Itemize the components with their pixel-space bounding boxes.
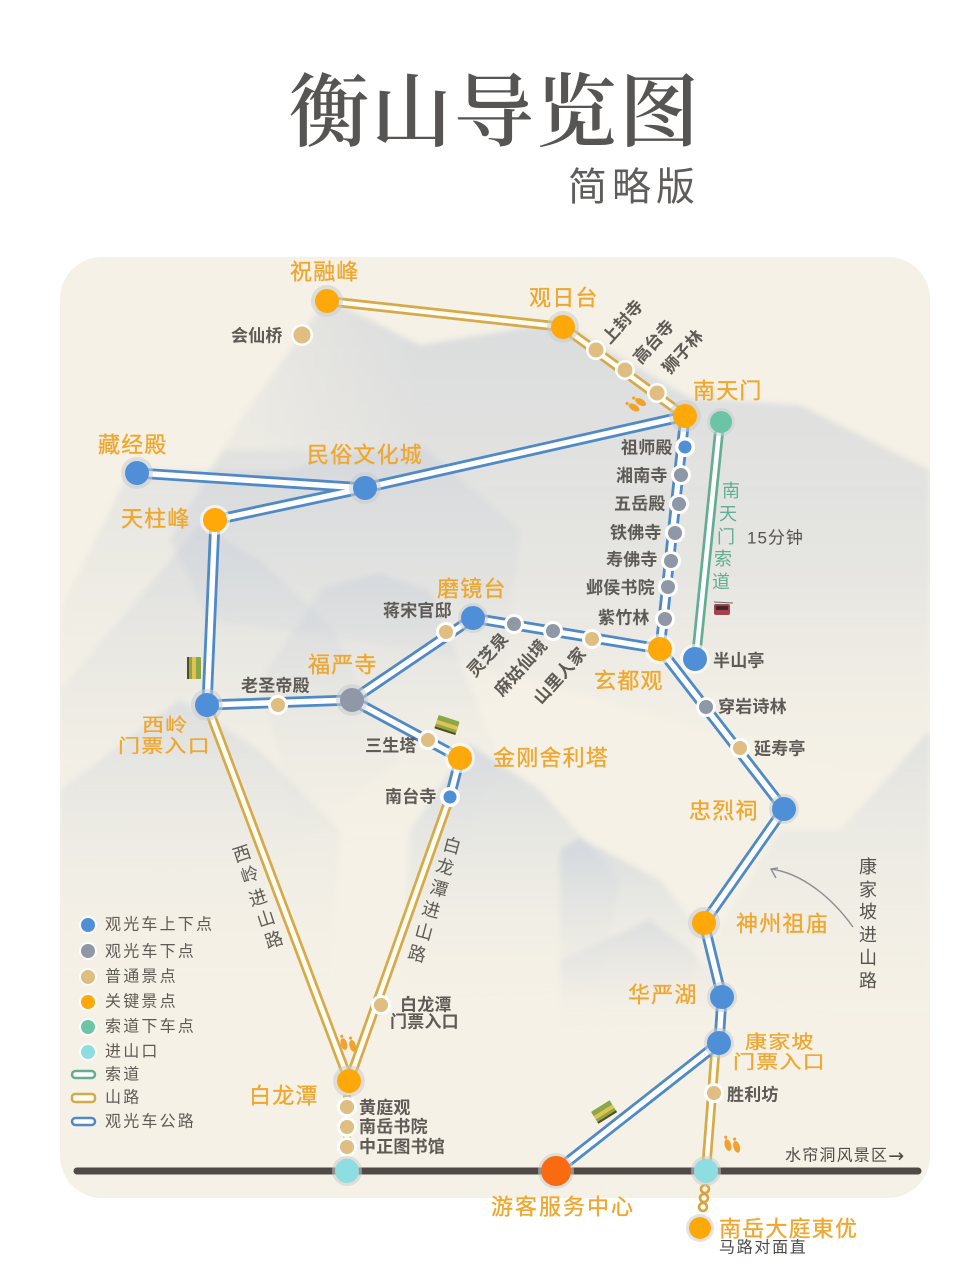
- label: 观日台: 观日台: [529, 286, 599, 310]
- node: 康家坡门票入口: [704, 1028, 734, 1058]
- label: 康家坡进山路 (vertical): 进: [859, 925, 877, 945]
- label: 玄都观: 玄都观: [594, 668, 664, 694]
- label: 西岭进山路: 路: [262, 928, 286, 952]
- label: 南天门索道 (vertical): 道: [712, 572, 730, 592]
- label: 华严湖: 华严湖: [628, 982, 698, 1008]
- legend item: 普通景点: [79, 968, 178, 986]
- label: 南天门索道 (vertical): 门: [717, 527, 735, 547]
- route: chain to south gate: [699, 1185, 709, 1211]
- label: 水帘洞风景区: 水帘洞风景区→: [785, 1145, 905, 1167]
- label: 南岳书院: 南岳书院: [359, 1116, 428, 1136]
- label: 磨镜台: 磨镜台: [437, 576, 507, 602]
- node: 观日台: [547, 311, 579, 343]
- node: 玄都观: [645, 634, 675, 664]
- label: 白龙潭进山路: 白: [441, 834, 463, 858]
- label: 灵芝泉: 灵芝泉: [463, 629, 512, 681]
- node: 寿佛寺: [661, 551, 681, 571]
- label: 紫竹林: 紫竹林: [598, 608, 650, 628]
- label: 康家坡门票入口: 门票入口: [733, 1052, 826, 1073]
- node: 山里人家: [582, 629, 602, 649]
- label: 神州祖庙: 神州祖庙: [736, 912, 829, 936]
- legend item: 进山口: 进山口: [105, 1042, 160, 1060]
- node: 华严湖: [707, 982, 737, 1012]
- label: 西岭进山路: [230, 842, 286, 952]
- node: 神州祖庙: [688, 907, 720, 939]
- label: 金刚舍利塔: 金刚舍利塔: [493, 746, 609, 770]
- label: 中正图书馆: 中正图书馆: [359, 1136, 445, 1156]
- icon: bus near 金刚舍利塔: [434, 715, 460, 735]
- label: 穿岩诗林: 穿岩诗林: [718, 696, 787, 716]
- node: 半山亭: [680, 644, 710, 674]
- label: 康家坡进山路 (vertical): [859, 857, 877, 991]
- label: 西岭门票入口: 门票入口: [118, 736, 211, 757]
- panel: map background: [60, 257, 930, 1198]
- node: 祖师殿: [675, 437, 695, 457]
- node: 灵芝泉: [504, 614, 524, 634]
- label: 白龙潭进山路: 龙: [434, 855, 456, 879]
- label: 半山亭: 半山亭: [713, 650, 765, 670]
- label: 白龙潭: 白龙潭: [249, 1084, 319, 1108]
- label: 狮子林: 狮子林: [659, 326, 707, 378]
- label: 白龙潭进山路: 山: [413, 920, 435, 944]
- legend item: 山路: 山路: [105, 1088, 141, 1106]
- node: 五岳殿: [669, 494, 689, 514]
- legend item: 观光车公路: [72, 1112, 196, 1130]
- label: 南天门索道 (vertical): 天: [719, 504, 737, 524]
- label: 白龙潭进山路: [406, 834, 463, 966]
- label: 西岭进山路: 进: [246, 886, 270, 910]
- title: 衡山导览图: [289, 70, 702, 158]
- label: 白龙潭进山路: 进: [420, 898, 442, 922]
- node: 蒋宋官邸: [436, 622, 456, 642]
- label: 三生塔: 三生塔: [365, 736, 417, 756]
- node: 黄庭观: [337, 1097, 357, 1117]
- label: 西岭进山路: 山: [254, 907, 278, 931]
- node: 延寿亭: [730, 738, 750, 758]
- node: 白龙潭门票入口: [371, 995, 391, 1015]
- icon: footprints near 康家坡: [722, 1133, 741, 1156]
- label: 福严寺: 福严寺: [308, 652, 378, 678]
- label: 白龙潭门票入口: 门票入口: [390, 1012, 459, 1032]
- node: 磨镜台: [458, 603, 488, 633]
- label: 祝融峰: 祝融峰: [290, 260, 360, 284]
- label: 山里人家: 山里人家: [529, 643, 590, 708]
- label: 南天门索道 (vertical): [712, 481, 740, 592]
- label: 康家坡进山路 (vertical): 山: [859, 948, 877, 968]
- legend item: 关键景点: [79, 992, 178, 1011]
- label: 寿佛寺: 寿佛寺: [606, 550, 658, 570]
- legend: [72, 916, 214, 1130]
- node: 游客服务中心: [538, 1153, 574, 1189]
- label: 南天门: 南天门: [693, 378, 763, 404]
- label: 南岳大庙东街: 南岳大庭東优: [719, 1216, 858, 1242]
- label: 南天门索道 (vertical): 索: [714, 549, 732, 569]
- label: 康家坡进山路 (vertical): 坡: [859, 902, 877, 922]
- label: 游客服务中心: 游客服务中心: [491, 1194, 635, 1220]
- node: 南台寺: [440, 787, 460, 807]
- label: 上封寺: 上封寺: [599, 296, 647, 348]
- route: sightseeing bus roads: [137, 416, 784, 1171]
- node: 湘南寺: [671, 465, 691, 485]
- label: 黄庭观: 黄庭观: [359, 1098, 411, 1118]
- label: 白龙潭进山路: 潭: [428, 877, 450, 901]
- label: 延寿亭: 延寿亭: [754, 738, 806, 758]
- node: 民俗文化城: [349, 472, 381, 504]
- route: mountain roads: [207, 301, 716, 1171]
- node: 白龙潭: [333, 1065, 365, 1097]
- node: 南天门: [669, 400, 701, 432]
- label: 民俗文化城: 民俗文化城: [307, 442, 423, 468]
- node: 南天门索道下车点: [707, 408, 735, 436]
- node: 麻姑仙境: [543, 621, 563, 641]
- label: 白龙潭进山路: 路: [406, 942, 428, 966]
- node: 三生塔: [418, 730, 438, 750]
- label: 西岭门票入口: 西岭: [142, 715, 188, 736]
- label: 高台寺: 高台寺: [629, 316, 678, 368]
- legend item: 关键景点: 关键景点: [105, 992, 178, 1010]
- label: 康家坡进山路 (vertical): 康: [859, 857, 877, 877]
- node: 忠烈祠: [769, 794, 799, 824]
- node: 紫竹林: [655, 609, 675, 629]
- node: 西岭门票入口: [191, 689, 223, 721]
- label: 马路对面直: 马路对面直: [719, 1238, 808, 1256]
- label: 康家坡门票入口: 康家坡: [745, 1032, 815, 1053]
- label: 铁佛寺: 铁佛寺: [610, 524, 662, 542]
- legend item: 观光车上下点: 观光车上下点: [105, 916, 214, 934]
- legend item: 山路: [72, 1088, 141, 1106]
- label: 15分钟: 15分钟: [747, 528, 804, 548]
- node: 福严寺: [336, 684, 368, 716]
- node: 祝融峰: [311, 285, 343, 317]
- route: cableway: [697, 432, 719, 648]
- node: 胜利坊: [704, 1083, 724, 1103]
- icon: cable car: [714, 602, 733, 615]
- label: 南台寺: 南台寺: [385, 786, 437, 806]
- node: 藏经殿: [121, 457, 153, 489]
- label: 白龙潭门票入口: 白龙潭: [400, 996, 452, 1014]
- icon: footprints near 白龙潭: [338, 1032, 357, 1055]
- node: 南岳书院: [337, 1117, 357, 1137]
- icon: bus near 游客服务中心: [591, 1100, 617, 1124]
- node: 天柱峰: [200, 505, 230, 535]
- label: 邺侯书院: 邺侯书院: [586, 578, 655, 598]
- legend item: 普通景点: 普通景点: [105, 968, 178, 986]
- node: 铁佛寺: [665, 523, 685, 543]
- legend item: 观光车公路: 观光车公路: [105, 1112, 196, 1130]
- label: 老圣帝殿: 老圣帝殿: [241, 676, 310, 696]
- icon: footprints near 南天门: [624, 393, 647, 415]
- node: 会仙桥: [291, 324, 313, 346]
- mountains backdrop: [60, 298, 930, 1040]
- node: 狮子林: [647, 383, 667, 403]
- label: 康家坡进山路 (vertical): 路: [859, 971, 877, 991]
- label: 湘南寺: 湘南寺: [616, 466, 668, 486]
- node: 金刚舍利塔: [445, 743, 475, 773]
- legend item: 索道: [72, 1066, 141, 1084]
- label: 西岭进山路: 岭: [238, 863, 262, 887]
- node: 高台寺: [615, 360, 635, 380]
- label: 五岳殿: 五岳殿: [614, 494, 666, 514]
- node: 南岳大庙: [686, 1214, 714, 1242]
- label: 天柱峰: 天柱峰: [121, 506, 191, 532]
- label: 忠烈祠: 忠烈祠: [689, 798, 759, 824]
- label: 白龙潭门票入口: [390, 996, 459, 1032]
- label: 康家坡进山路 (vertical): 家: [859, 880, 877, 900]
- node: 穿岩诗林: [696, 697, 716, 717]
- node: 上封寺: [586, 340, 606, 360]
- label: 康家坡门票入口: [733, 1032, 826, 1073]
- label: 蒋宋官邸: 蒋宋官邸: [383, 600, 452, 620]
- main road: [77, 1168, 918, 1174]
- legend item: 索道下车点: 索道下车点: [105, 1018, 196, 1036]
- node: 西侧进山口: [332, 1156, 362, 1186]
- node: 中正图书馆: [337, 1137, 357, 1157]
- legend item: 进山口: [79, 1042, 160, 1061]
- route: dotted link Bailongtan: [343, 1095, 351, 1160]
- label: 祖师殿: 祖师殿: [621, 438, 673, 458]
- label: 胜利坊: 胜利坊: [727, 1084, 779, 1104]
- subtitle: 简略版: [568, 166, 700, 210]
- label: 南天门索道 (vertical): 南: [722, 481, 740, 501]
- label: 麻姑仙境: 麻姑仙境: [490, 635, 551, 700]
- node: 老圣帝殿: [268, 695, 288, 715]
- label: 会仙桥: 会仙桥: [231, 326, 283, 346]
- icon: bus near 西岭: [187, 657, 201, 679]
- arrow: 康家坡进山路 pointer: [771, 868, 853, 927]
- label: 藏经殿: 藏经殿: [98, 432, 168, 458]
- label: 西岭进山路: 西: [230, 842, 254, 866]
- node: 邺侯书院: [658, 577, 678, 597]
- legend item: 观光车下点: 观光车下点: [105, 942, 196, 960]
- label: 西岭门票入口: [118, 715, 211, 757]
- node: 东侧进山口: [691, 1156, 721, 1186]
- legend item: 索道: 索道: [105, 1066, 141, 1084]
